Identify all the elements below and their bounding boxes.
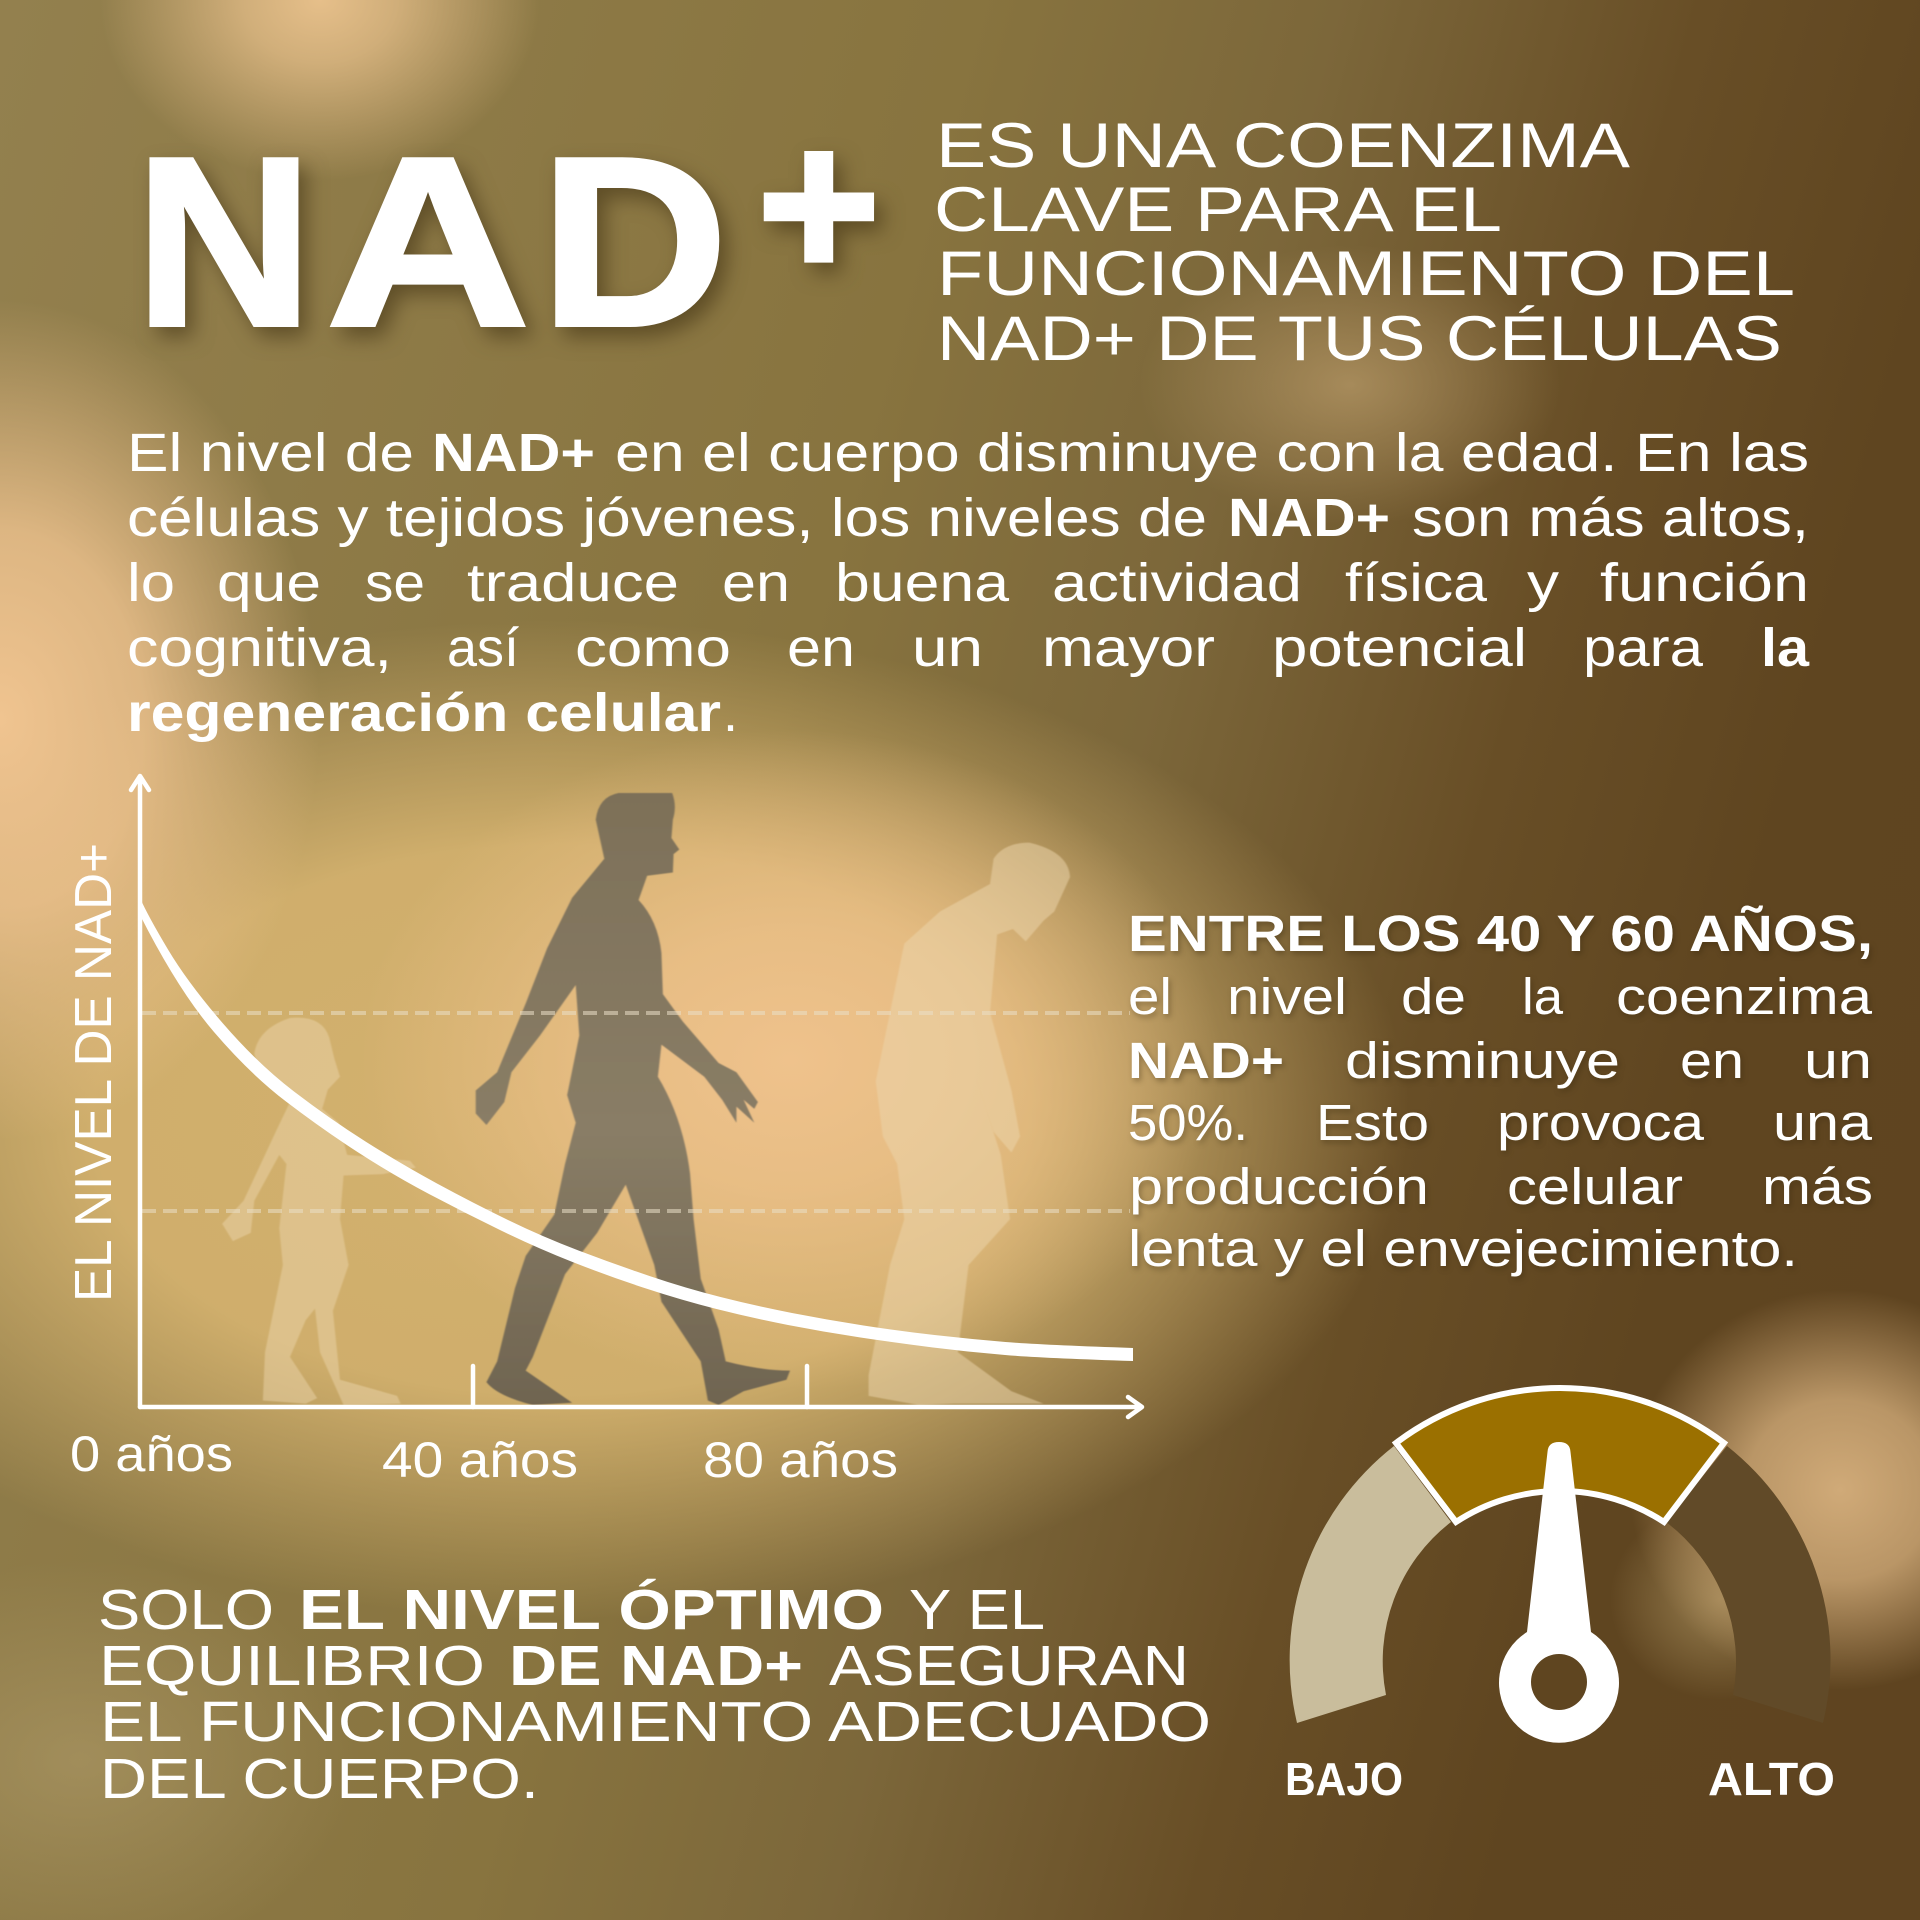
text block: 40 to 60 years: un bbox=[1804, 1032, 1872, 1089]
intro paragraph: actividad bbox=[1052, 553, 1302, 613]
text block: optimal level: ASEGURAN bbox=[829, 1634, 1189, 1698]
subtitle bbox=[934, 111, 1795, 374]
text block: 40 to 60 years: en bbox=[1680, 1032, 1744, 1089]
subtitle: FUNCIONAMIENTO DEL bbox=[937, 239, 1795, 309]
intro paragraph: y bbox=[1527, 553, 1559, 613]
intro paragraph: NAD+ bbox=[432, 423, 595, 483]
title: NAD+: + bbox=[758, 89, 879, 321]
gauge needle bbox=[1499, 1442, 1619, 1743]
gauge bbox=[1285, 1388, 1835, 1805]
chart: NAD+ level by age bbox=[65, 776, 1142, 1488]
title: NAD+: N bbox=[135, 108, 313, 377]
intro paragraph: función bbox=[1600, 553, 1809, 613]
text block: 40 to 60 years: coenzima bbox=[1616, 968, 1873, 1025]
intro paragraph: células y tejidos jóvenes, los niveles de bbox=[127, 488, 1207, 548]
subtitle: CLAVE PARA EL bbox=[934, 175, 1502, 245]
text block: optimal level bbox=[98, 1578, 1211, 1811]
intro paragraph: la bbox=[1761, 618, 1810, 678]
intro paragraph: regeneración celular bbox=[127, 683, 721, 743]
subtitle: NAD+ DE TUS CÉLULAS bbox=[937, 304, 1782, 374]
text block: 40 to 60 years: una bbox=[1773, 1094, 1873, 1151]
text block: 40 to 60 years: ENTRE LOS 40 Y 60 AÑOS, bbox=[1128, 904, 1873, 962]
intro paragraph: lo bbox=[127, 553, 175, 613]
text block: 40 to 60 years: lenta y el envejecimiento. bbox=[1128, 1220, 1798, 1277]
silhouette: elder bbox=[869, 843, 1070, 1405]
intro paragraph: son más altos, bbox=[1412, 488, 1809, 548]
intro paragraph: buena bbox=[835, 553, 1010, 613]
text block: 40 to 60 years: producción bbox=[1129, 1158, 1429, 1215]
intro paragraph: potencial bbox=[1272, 618, 1527, 678]
intro paragraph: así bbox=[447, 618, 519, 678]
text block: 40 to 60 years: nivel bbox=[1227, 968, 1347, 1025]
text block: 40 to 60 years: de bbox=[1401, 968, 1466, 1025]
text block: optimal level: DE NAD+ bbox=[509, 1634, 803, 1698]
intro paragraph: en bbox=[787, 618, 855, 678]
intro paragraph: en el cuerpo disminuye con la edad. En las bbox=[615, 423, 1809, 483]
gauge label: low: BAJO bbox=[1285, 1753, 1403, 1805]
text block: 40 to 60 years: provoca bbox=[1497, 1094, 1705, 1151]
intro paragraph: cognitiva, bbox=[127, 618, 392, 678]
text block: optimal level: EQUILIBRIO bbox=[99, 1634, 485, 1698]
text block: 40 to 60 years: el bbox=[1128, 968, 1172, 1025]
silhouette: child bbox=[222, 1018, 416, 1405]
text block: optimal level: Y EL bbox=[909, 1578, 1045, 1642]
gauge segment: low bbox=[1290, 1446, 1451, 1723]
intro paragraph: para bbox=[1583, 618, 1704, 678]
x-axis labels: 40 años bbox=[382, 1432, 578, 1488]
silhouette: adult bbox=[476, 793, 790, 1405]
x-axis labels: 0 años bbox=[70, 1426, 233, 1482]
intro paragraph: . bbox=[723, 683, 738, 743]
text block: 40 to 60 years: NAD+ bbox=[1128, 1032, 1284, 1089]
intro paragraph: se bbox=[365, 553, 425, 613]
text block: 40 to 60 years: disminuye bbox=[1345, 1032, 1620, 1089]
text block: 40 to 60 years: Esto bbox=[1316, 1094, 1429, 1151]
y-axis label: EL NIVEL DE NAD+ bbox=[65, 843, 123, 1302]
title: NAD+: D bbox=[540, 108, 728, 377]
text block: 40 to 60 years: 50%. bbox=[1128, 1094, 1248, 1151]
intro paragraph: como bbox=[575, 618, 731, 678]
text block: optimal level: SOLO bbox=[98, 1578, 274, 1642]
text block: optimal level: DEL CUERPO. bbox=[100, 1747, 539, 1811]
intro paragraph: física bbox=[1345, 553, 1488, 613]
intro paragraph: traduce bbox=[467, 553, 679, 613]
intro paragraph: un bbox=[912, 618, 983, 678]
dashed level lines bbox=[142, 1013, 1130, 1211]
intro paragraph: en bbox=[722, 553, 790, 613]
gauge label: high: ALTO bbox=[1708, 1753, 1835, 1805]
NAD+ decline curve bbox=[140, 898, 1133, 1361]
title: NAD+ bbox=[135, 89, 879, 377]
text block: 40 to 60 years: más bbox=[1762, 1158, 1873, 1215]
intro paragraph: NAD+ bbox=[1228, 488, 1390, 548]
x-axis labels: 80 años bbox=[703, 1432, 898, 1488]
intro paragraph bbox=[127, 423, 1810, 743]
intro paragraph: que bbox=[217, 553, 321, 613]
gauge segment: high bbox=[1666, 1446, 1831, 1723]
x-axis labels bbox=[70, 1426, 898, 1488]
axes with arrows bbox=[131, 776, 1142, 1417]
gauge segment: optimal bbox=[1396, 1388, 1724, 1522]
text block: 40 to 60 years: la bbox=[1522, 968, 1564, 1025]
text block: optimal level: EL NIVEL ÓPTIMO bbox=[299, 1578, 884, 1642]
intro paragraph: El nivel de bbox=[127, 423, 414, 483]
text block: 40 to 60 years: celular bbox=[1507, 1158, 1683, 1215]
title: NAD+: A bbox=[326, 108, 530, 377]
text block: 40 to 60 years bbox=[1128, 904, 1873, 1277]
intro paragraph: mayor bbox=[1042, 618, 1215, 678]
subtitle: ES UNA COENZIMA bbox=[936, 111, 1630, 181]
text block: optimal level: EL FUNCIONAMIENTO ADECUADO bbox=[100, 1690, 1211, 1754]
